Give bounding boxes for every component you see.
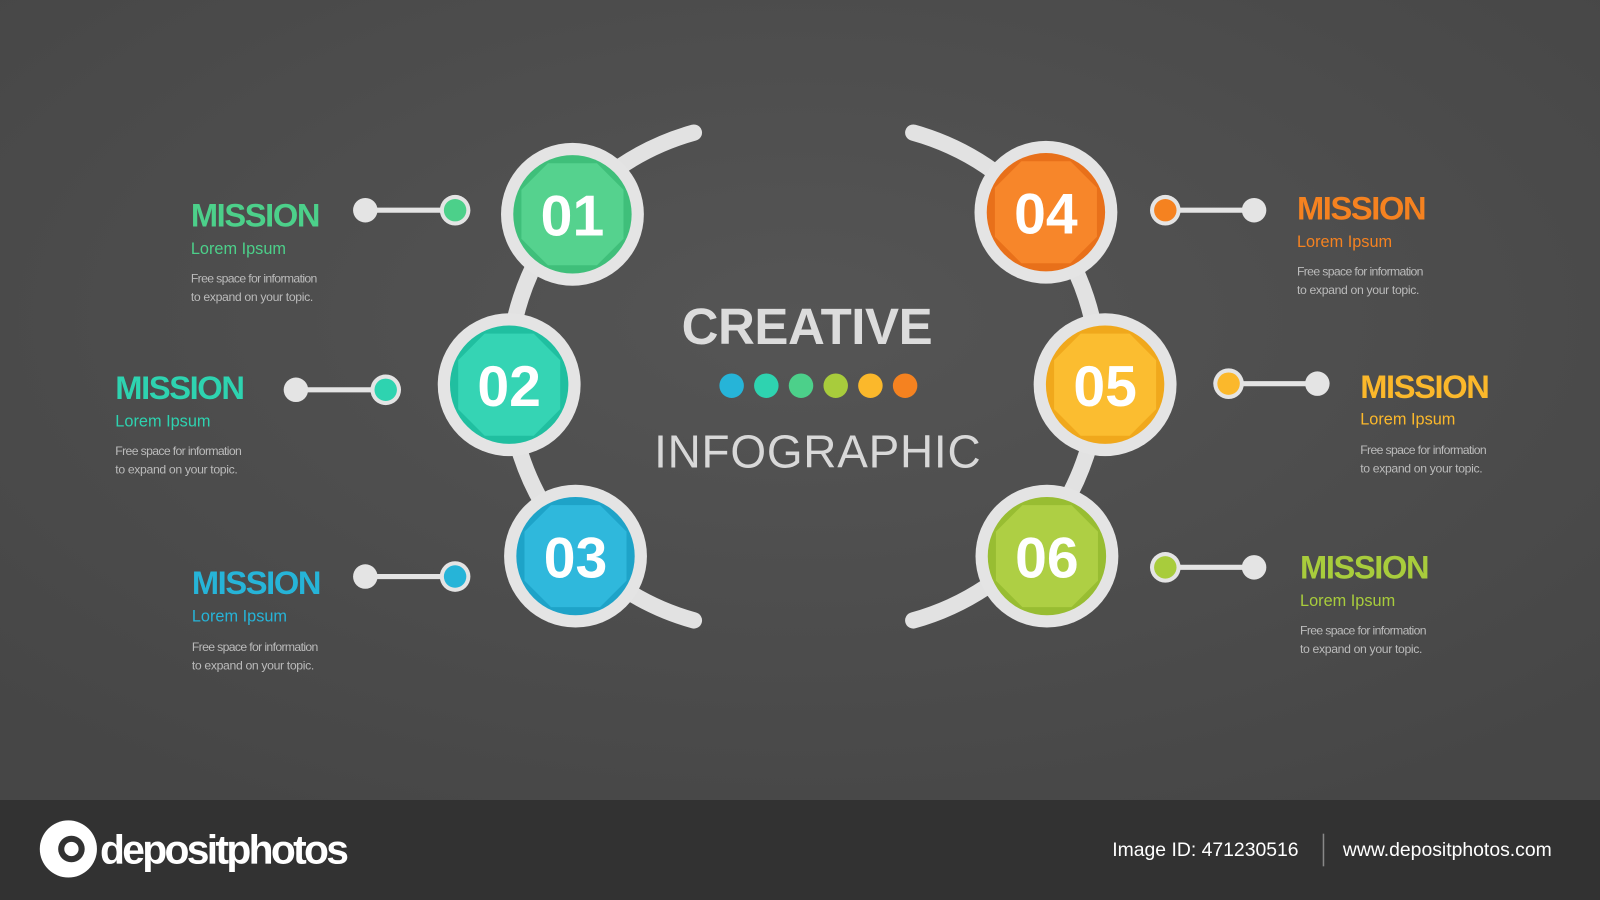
- center title: INFOGRAPHIC: [654, 425, 981, 477]
- step 01: [191, 143, 644, 304]
- step 01: to expand on your topic.: [191, 290, 313, 304]
- step 05: [1034, 313, 1490, 475]
- step 04: [974, 141, 1427, 297]
- step 03: [192, 485, 647, 672]
- step 05: to expand on your topic.: [1360, 461, 1483, 475]
- footer: depositphotos: [100, 826, 349, 872]
- step 02: Free space for information: [115, 444, 242, 458]
- left arc: [508, 133, 694, 620]
- step 01: MISSION: [191, 197, 320, 234]
- step 02: MISSION: [115, 369, 245, 406]
- step 05: Lorem Ipsum: [1360, 410, 1455, 428]
- step 02: Lorem Ipsum: [115, 413, 211, 431]
- step 03: MISSION: [192, 564, 321, 601]
- right arc: [913, 133, 1099, 620]
- step 06: MISSION: [1300, 549, 1430, 586]
- step 01: Lorem Ipsum: [191, 240, 286, 258]
- center title: [654, 298, 981, 477]
- step 05: Free space for information: [1360, 443, 1487, 457]
- step 01: Free space for information: [191, 272, 318, 286]
- step 06: [976, 485, 1430, 656]
- step 04: Free space for information: [1297, 265, 1424, 279]
- step 06: 06: [1015, 527, 1079, 591]
- footer: [0, 800, 1600, 900]
- step 03: Free space for information: [192, 640, 319, 654]
- step 04: to expand on your topic.: [1297, 283, 1419, 297]
- center title: CREATIVE: [682, 298, 933, 355]
- step 06: Lorem Ipsum: [1300, 592, 1395, 610]
- step 05: 05: [1073, 355, 1137, 419]
- step 02: 02: [477, 355, 541, 419]
- step 06: Free space for information: [1300, 624, 1427, 638]
- step 03: to expand on your topic.: [192, 658, 314, 672]
- step 04: MISSION: [1297, 189, 1427, 226]
- step 05: MISSION: [1360, 368, 1490, 405]
- footer: www.depositphotos.com: [1342, 839, 1552, 861]
- step 02: to expand on your topic.: [115, 462, 238, 476]
- step 01: 01: [541, 185, 604, 249]
- step 03: Lorem Ipsum: [192, 607, 287, 625]
- step 06: to expand on your topic.: [1300, 642, 1422, 656]
- step 04: 04: [1014, 183, 1078, 247]
- step 03: 03: [544, 527, 607, 591]
- step 04: Lorem Ipsum: [1297, 233, 1392, 251]
- step 02: [115, 313, 581, 476]
- footer: Image ID: 471230516: [1112, 839, 1299, 861]
